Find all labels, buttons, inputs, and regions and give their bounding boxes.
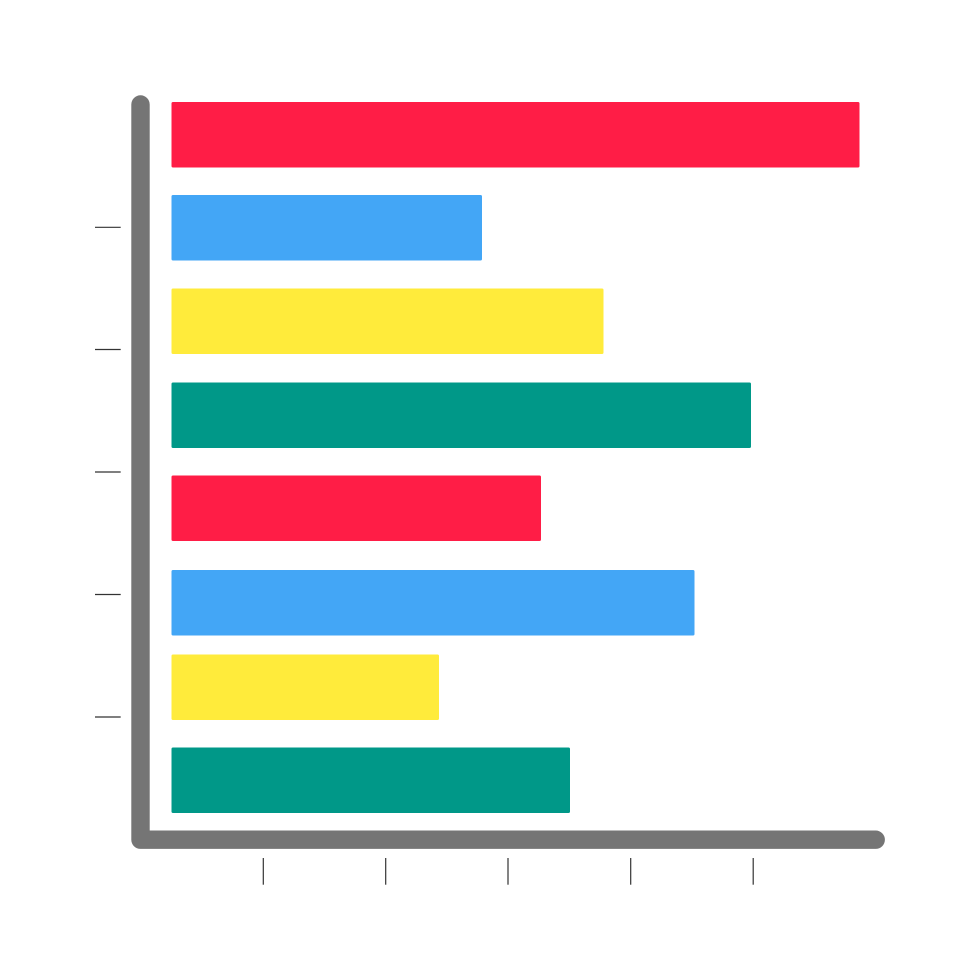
bar 4: teal bbox=[172, 382, 751, 448]
bar 1: red bbox=[172, 102, 860, 168]
bar 2: blue bbox=[172, 195, 482, 260]
y-axis tick marks bbox=[95, 227, 121, 717]
bar 6: blue bbox=[172, 570, 694, 636]
bar 7: yellow bbox=[172, 654, 439, 720]
bar 3: yellow bbox=[172, 288, 604, 354]
chart axes bbox=[140, 104, 876, 840]
bar 8: teal bbox=[172, 748, 570, 813]
bar 5: red bbox=[172, 476, 541, 541]
bars bbox=[172, 102, 860, 813]
x-axis tick marks bbox=[263, 858, 753, 885]
